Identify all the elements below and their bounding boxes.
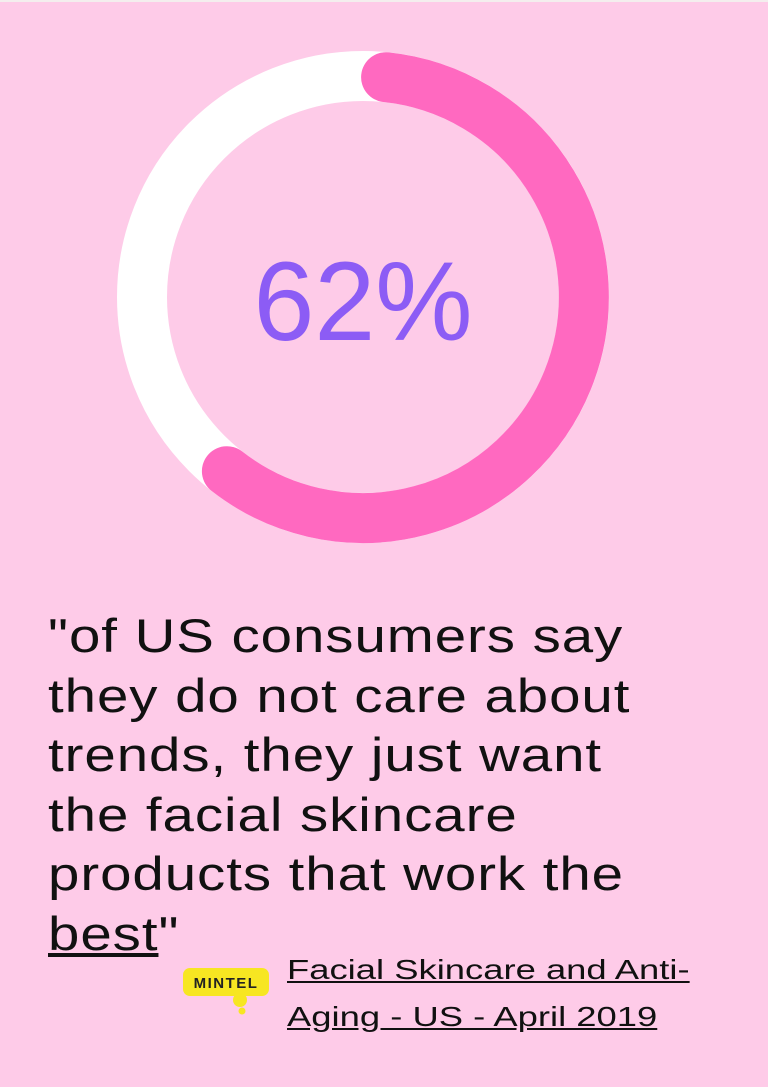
quote text: best"	[48, 906, 179, 960]
percentage label: 62%	[254, 239, 472, 364]
quote text: the facial skincare	[48, 788, 518, 840]
quote text: they do not care about	[48, 668, 630, 722]
citation	[287, 954, 690, 1032]
icon: Mintel logo	[183, 968, 269, 1014]
quote text: "of US consumers say	[48, 609, 623, 662]
ring track	[142, 76, 584, 518]
quote text: trends, they just want	[48, 728, 602, 781]
citation: Aging - US - April 2019	[287, 1001, 657, 1032]
citation: Facial Skincare and Anti-	[287, 954, 690, 985]
donut chart	[117, 51, 609, 544]
ring progress arc 62%	[227, 77, 584, 518]
quote text: products that work the	[48, 847, 624, 900]
quote text	[48, 609, 630, 960]
icon: Mintel logo: MINTEL	[194, 975, 258, 992]
